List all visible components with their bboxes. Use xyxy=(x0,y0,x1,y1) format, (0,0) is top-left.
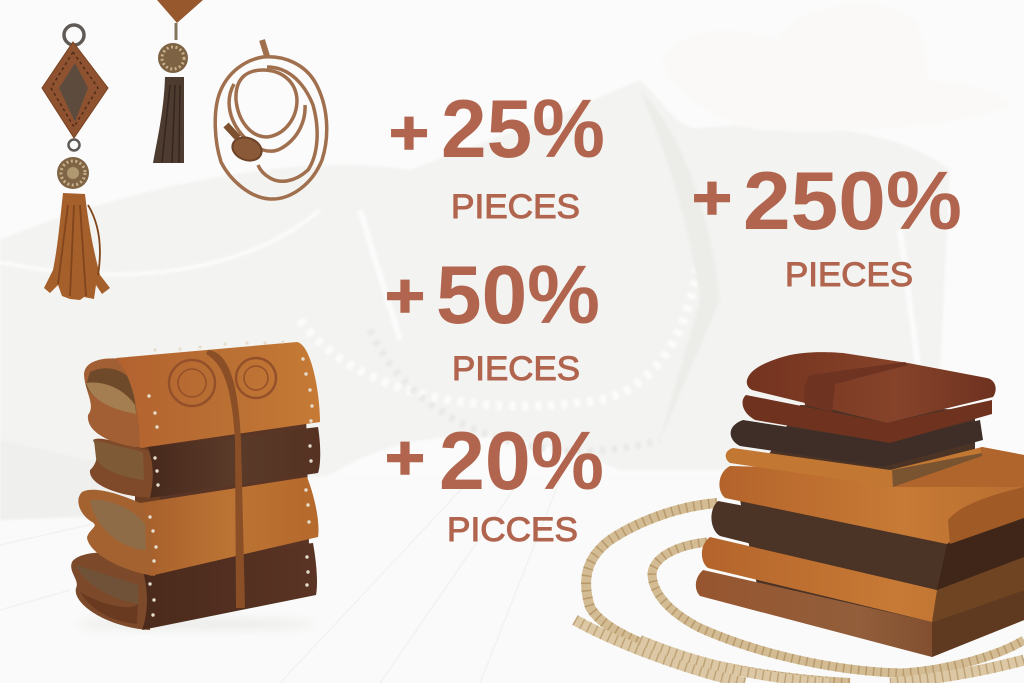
layer: dark wallet xyxy=(731,420,983,467)
roll 2: dark brown xyxy=(90,427,320,498)
stat: +250% pieces: PIECES xyxy=(785,256,913,294)
roll 3: tan xyxy=(78,477,319,576)
layer: thin orange xyxy=(726,448,982,487)
coiled leather cord xyxy=(215,40,327,199)
roll 4: bottom dark brown xyxy=(71,543,317,630)
stat: +250% pieces xyxy=(692,154,962,294)
layer: tan xyxy=(702,537,1024,622)
stat: +20% pieces: + xyxy=(385,424,425,493)
stat: +20% pieces: 20% xyxy=(439,414,604,507)
stat: +50% pieces: 50% xyxy=(436,248,600,341)
faded saddle backdrop xyxy=(0,80,950,520)
layer: lower red wallet xyxy=(743,395,992,443)
rope coil xyxy=(575,503,1024,683)
rolled leather stack xyxy=(71,340,320,630)
stat: +20% pieces xyxy=(385,414,604,549)
layer: dark brown xyxy=(711,501,1024,590)
stat: +50% pieces: + xyxy=(385,262,425,331)
stat: +25% pieces: 25% xyxy=(441,82,605,175)
embossed medallions xyxy=(169,358,276,406)
charm: small tassel xyxy=(153,0,203,163)
studs xyxy=(147,340,314,617)
stat: +50% pieces: PIECES xyxy=(452,350,580,388)
stat: +20% pieces: PICCES xyxy=(447,511,578,549)
stat: +25% pieces: PIECES xyxy=(451,188,580,226)
layer: large tan xyxy=(719,447,1024,544)
folded leather stack xyxy=(696,352,1024,657)
roll 1: top tan xyxy=(84,342,320,448)
stat: +250% pieces: 250% xyxy=(743,154,962,247)
floor boards xyxy=(0,480,560,683)
charm: diamond with tassel xyxy=(42,25,110,300)
leather tie xyxy=(206,350,245,608)
layer: bottom rust xyxy=(696,570,1024,657)
stat: +250% pieces: + xyxy=(692,164,732,233)
stat: +25% pieces: + xyxy=(389,99,429,168)
wallet strap xyxy=(804,362,908,412)
stat: +50% pieces xyxy=(385,248,600,388)
stat: +25% pieces xyxy=(389,82,605,226)
layer: top red wallet xyxy=(747,352,996,423)
faded cowboy hat xyxy=(662,4,1012,131)
